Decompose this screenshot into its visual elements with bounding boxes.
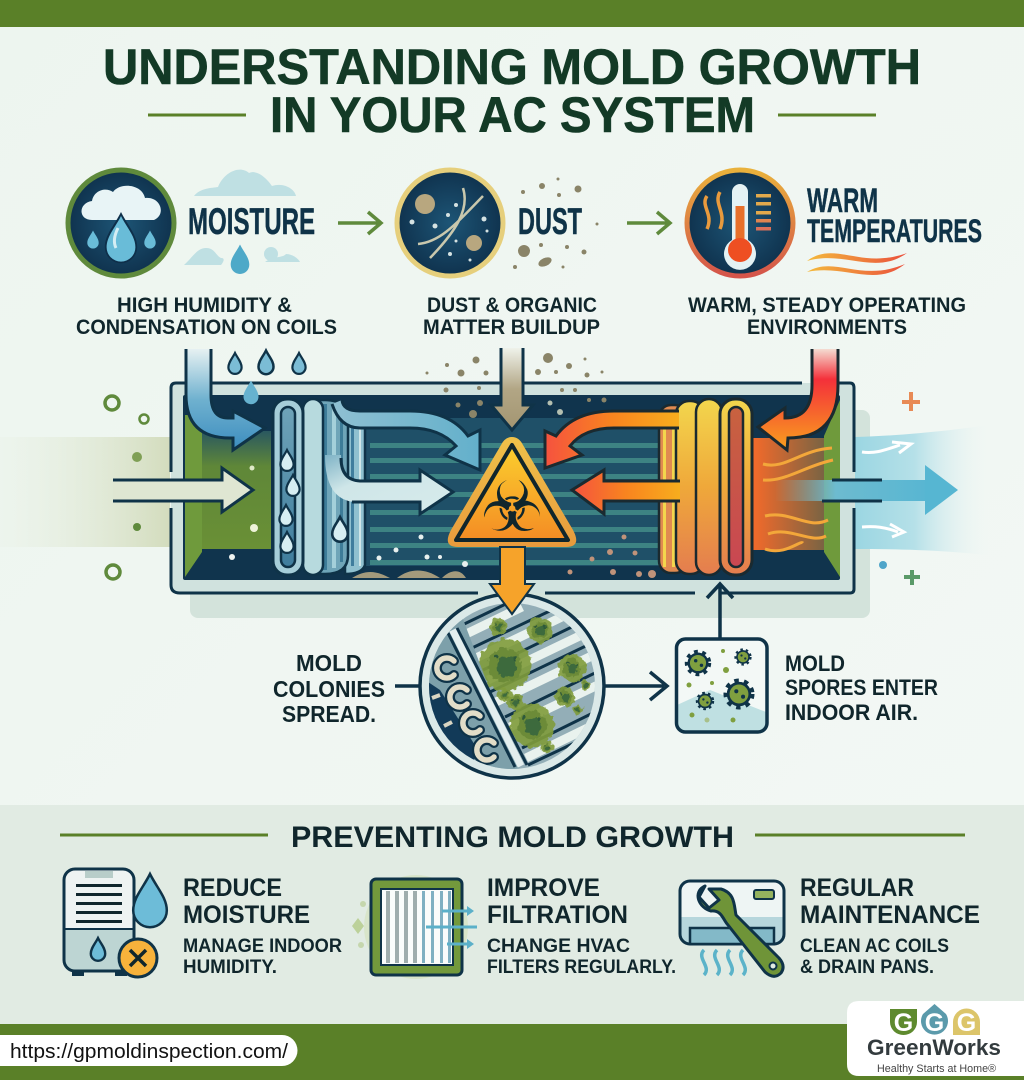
icon: three logo marks: G: [957, 1009, 976, 1037]
text: mold spores enter indoor air: SPORES ENTER: [785, 675, 938, 700]
drops above duct: [228, 350, 306, 404]
text: mold colonies spread: MOLD: [296, 650, 362, 676]
text: warm description: WARM, STEADY OPERATING: [688, 294, 966, 317]
text: improve filtration: IMPROVE: [487, 874, 600, 902]
dust specks above duct: [426, 353, 606, 418]
URL pill: [0, 1035, 298, 1066]
bottom green bar: [0, 1024, 1024, 1080]
icon: three logo marks: G: [894, 1009, 913, 1037]
magnified coil with mold colonies: [420, 590, 604, 778]
text: moisture description: [76, 294, 337, 339]
panel: warm temperatures cause: [687, 170, 982, 339]
fin highlights: [462, 607, 604, 758]
text: mold colonies spread: [273, 650, 385, 727]
arrow: upper blue airflow: [332, 400, 480, 470]
icon: air filter: [352, 875, 477, 979]
icon: rain cloud and drop: [68, 170, 174, 276]
text: reduce moisture: [183, 874, 342, 978]
duct shadow: [190, 410, 870, 618]
text: regular maintenance: REGULAR: [800, 874, 914, 902]
logo: GreenWorks: Healthy Starts at Home®: [877, 1063, 996, 1075]
arrow: inlet air: [113, 468, 253, 512]
text: reduce moisture: MOISTURE: [183, 901, 310, 929]
icon: warning sign with biohazard symbol: [448, 437, 576, 548]
text: moisture description: CONDENSATION ON COILS: [76, 316, 337, 339]
decorative air particles left: [105, 396, 148, 579]
logo: GreenWorks: GreenWorks: [867, 1035, 1001, 1060]
heading: preventing mold growth: PREVENTING MOLD GROWTH: [291, 821, 734, 854]
arrow: moisture to dust: [338, 212, 381, 234]
icon: dust particles and fibers: [397, 170, 503, 276]
text: reduce moisture: REDUCE: [183, 874, 282, 902]
fin lines: [458, 601, 601, 765]
arrow: warning down to mold colonies: [490, 547, 534, 614]
inlet air band: [0, 437, 170, 547]
URL pill: https://gpmoldinspection.com/: [10, 1040, 288, 1063]
heading: warm temperatures: [807, 182, 982, 249]
top green bar: [0, 0, 1024, 27]
text: improve filtration: FILTRATION: [487, 901, 628, 929]
icon: heat waves: [807, 253, 907, 275]
air handler diagram: [0, 348, 1024, 618]
text: mold spores enter indoor air: INDOOR AIR.: [785, 700, 918, 725]
text: regular maintenance: & DRAIN PANS.: [800, 957, 934, 978]
duct housing: [171, 383, 854, 593]
icon: wrench on AC unit: [680, 881, 784, 976]
green inlet chamber: [185, 395, 271, 577]
line: colonies to lens: [395, 684, 432, 688]
text: reduce moisture: HUMIDITY.: [183, 957, 277, 978]
arrow: moist air into coil: [186, 349, 265, 450]
text: mold spores enter indoor air: MOLD: [785, 651, 845, 676]
arrow: lower orange airflow: [572, 470, 680, 514]
icon: pale clouds and drop: [184, 170, 300, 274]
hot coil: [659, 399, 752, 575]
text: improve filtration: CHANGE HVAC: [487, 936, 630, 957]
text: warm description: ENVIRONMENTS: [747, 316, 907, 339]
text: regular maintenance: CLEAN AC COILS: [800, 936, 949, 957]
decorative air particles right: [879, 392, 920, 585]
heading: warm temperatures: WARM: [807, 182, 878, 220]
hot outlet chamber: [752, 400, 840, 577]
arrow: outlet air: [775, 442, 958, 537]
icon: three logo marks: G: [925, 1009, 944, 1037]
text: mold spores enter indoor air: [785, 651, 938, 725]
text: dust description: DUST & ORGANIC: [427, 294, 597, 317]
cold coil: [273, 399, 365, 575]
heading: moisture: MOISTURE: [188, 201, 315, 242]
panel: dust cause: [397, 170, 600, 339]
text: dust description: [423, 294, 600, 339]
arrow: dust to warm temperatures: [627, 212, 670, 234]
heading: dust: DUST: [518, 201, 582, 242]
text: improve filtration: FILTERS REGULARLY.: [487, 957, 676, 978]
icon: three logo marks: [890, 1004, 980, 1037]
icon: warning sign with biohazard symbol: ☣: [481, 466, 543, 548]
dust mounds in duct: [352, 534, 656, 578]
text: improve filtration: [487, 874, 676, 978]
panel: spores in air box: [675, 638, 768, 733]
arrow: dust downward: [491, 348, 533, 430]
mold blobs: [479, 617, 590, 754]
text: warm description: [688, 294, 966, 339]
arrow: lens to spores box: [605, 672, 667, 700]
text: moisture description: HIGH HUMIDITY &: [117, 294, 292, 317]
arrow: upper orange airflow: [545, 411, 679, 468]
text: regular maintenance: [800, 874, 980, 978]
arrow: spores box up into duct: [707, 584, 733, 638]
title: IN YOUR AC SYSTEM: [270, 87, 755, 143]
icon: thermometer: [687, 170, 793, 276]
text: mold colonies spread: COLONIES: [273, 676, 385, 702]
logo: GreenWorks: [847, 1001, 1024, 1076]
coil tubes panel: [429, 619, 520, 769]
arrow: hot air into coil: [758, 349, 838, 450]
panel: preventing mold growth: [0, 805, 1024, 1024]
text: dust description: MATTER BUILDUP: [423, 316, 600, 339]
outlet air band: [855, 420, 1024, 560]
panel: moisture cause: [68, 170, 337, 339]
text: reduce moisture: MANAGE INDOOR: [183, 936, 342, 957]
title: UNDERSTANDING MOLD GROWTH: [103, 39, 921, 95]
icon: dehumidifier: [64, 869, 167, 977]
title: [103, 39, 921, 143]
text: regular maintenance: MAINTENANCE: [800, 901, 980, 929]
text: mold colonies spread: SPREAD.: [282, 701, 376, 727]
icon: scattered dust specks: [513, 178, 598, 269]
arrow: lower cool airflow: [325, 455, 453, 514]
